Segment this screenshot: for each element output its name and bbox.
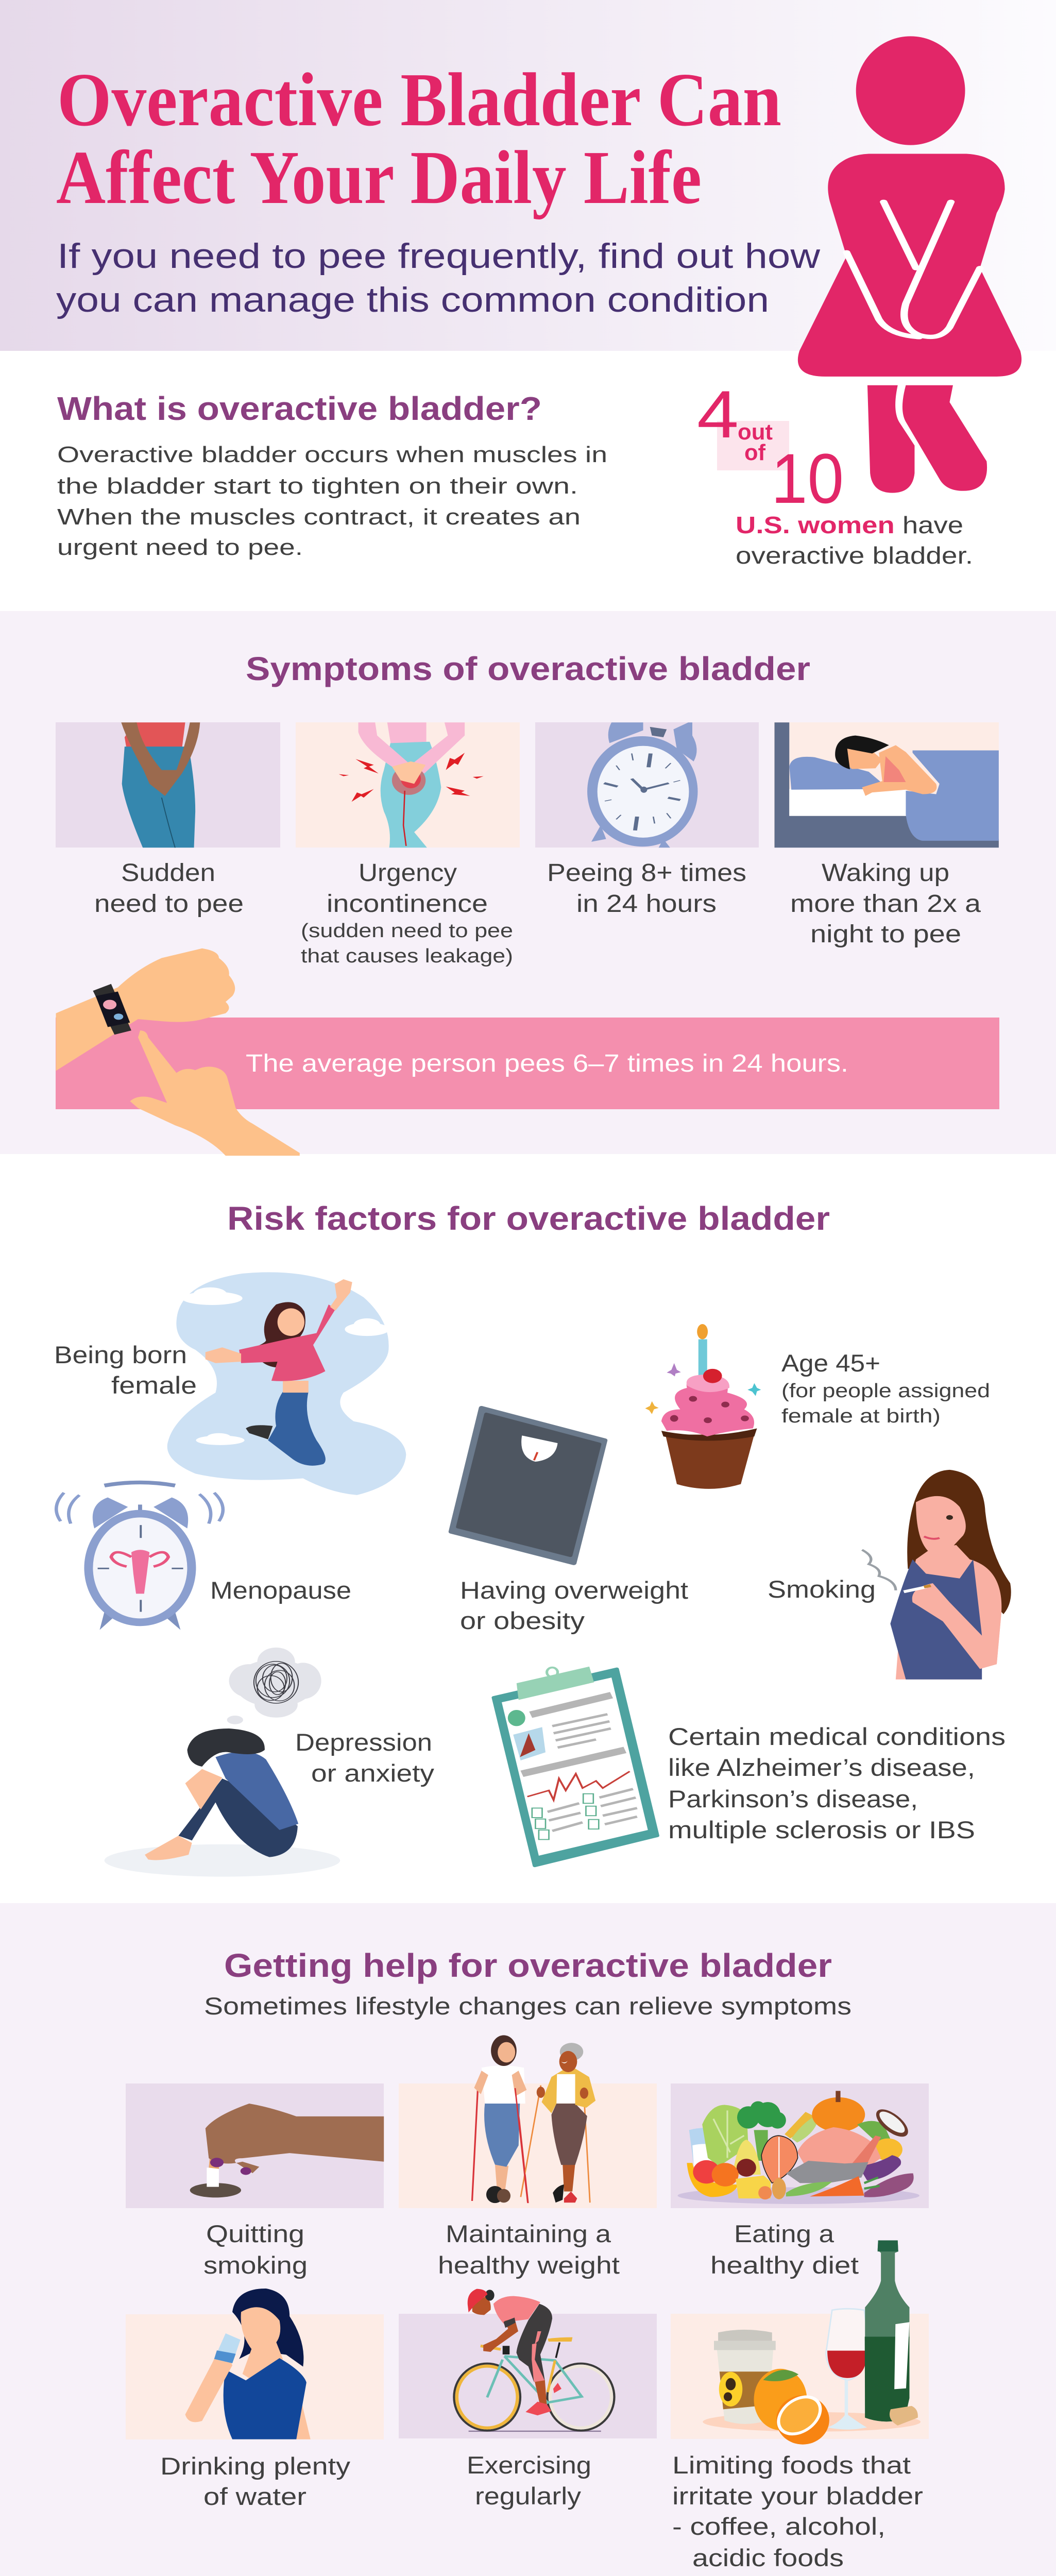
label: maintaining a healthy weight: Maintaining a <box>446 2220 611 2247</box>
label: eating a healthy diet: Eating a <box>734 2220 834 2247</box>
panel: urgency incontinence <box>296 722 520 848</box>
label: sudden need to pee: need to pee <box>94 890 244 918</box>
label: certain medical conditions: like Alzheimer’s disease, <box>668 1754 975 1781</box>
label: urgency incontinence: Urgency <box>359 859 457 887</box>
subtitle <box>56 236 821 319</box>
label: eating a healthy diet <box>710 2220 859 2279</box>
label: certain medical conditions: Parkinson’s disease, <box>668 1785 918 1812</box>
subtitle: you can manage this common condition <box>56 280 769 319</box>
icon: hands with smartwatch <box>56 948 300 1156</box>
text block: definition <box>57 442 607 560</box>
label: being born female <box>54 1341 197 1399</box>
illustration: woman smoking <box>862 1470 1011 1680</box>
label: limiting foods: Limiting foods that <box>672 2451 911 2479</box>
label: limiting foods <box>672 2451 923 2571</box>
label: age 45+: Age 45+ <box>781 1349 880 1377</box>
label: certain medical conditions: multiple sclerosis or IBS <box>668 1816 975 1843</box>
icon: medical clipboard <box>493 1667 657 1866</box>
illustration: being born female woman jumping <box>167 1272 406 1495</box>
panel: header background <box>0 0 1056 351</box>
label: exercising regularly: regularly <box>475 2482 582 2510</box>
panel: drinking plenty of water <box>126 2289 384 2439</box>
panel: eating a healthy diet <box>671 2083 929 2208</box>
label: exercising regularly: Exercising <box>467 2451 591 2479</box>
callout: 4 out of 10 statistic: U.S. women have <box>736 512 963 538</box>
label: urgency incontinence <box>301 859 513 967</box>
panel: limiting irritating foods <box>671 2240 929 2445</box>
panel: peeing 8+ times clock <box>535 722 759 848</box>
panel: getting help background <box>0 1903 1056 2576</box>
subtitle: If you need to pee frequently, find out how <box>57 236 821 276</box>
label: waking up more than 2x: Waking up <box>822 859 949 887</box>
panel: sudden need to pee <box>56 722 280 848</box>
label: being born female: female <box>111 1371 197 1399</box>
panel: maintaining a healthy weight <box>399 2035 657 2208</box>
label: urgency incontinence: incontinence <box>327 890 488 918</box>
label: drinking plenty of water: Drinking plenty <box>160 2452 351 2480</box>
label: quitting smoking <box>203 2220 308 2279</box>
label: sudden need to pee: Sudden <box>121 859 215 887</box>
label: maintaining a healthy weight <box>438 2220 620 2279</box>
label: certain medical conditions: Certain medical conditions <box>668 1723 1006 1750</box>
label: depression or anxiety: Depression <box>295 1728 432 1756</box>
label: drinking plenty of water: of water <box>203 2483 306 2510</box>
label: peeing 8+ times: Peeing 8+ times <box>547 859 746 887</box>
label: having overweight or obesity: or obesity <box>460 1607 585 1634</box>
label: limiting foods: acidic foods <box>692 2544 844 2571</box>
label: limiting foods: - coffee, alcohol, <box>672 2513 885 2540</box>
icon: cupcake <box>645 1324 761 1489</box>
title <box>56 58 781 220</box>
text block: definition: When the muscles contract, it creates an <box>57 504 581 530</box>
label: quitting smoking: Quitting <box>206 2220 304 2247</box>
callout: 4 out of 10 statistic <box>697 377 973 569</box>
subheading: lifestyle changes: Sometimes lifestyle changes can relieve symptoms <box>204 1992 851 2020</box>
label: sudden need to pee <box>94 859 244 918</box>
label: smoking: Smoking <box>768 1575 876 1603</box>
callout bar: average pees <box>56 1018 999 1109</box>
panel: risk factors background <box>0 1154 1056 1903</box>
label: being born female: Being born <box>54 1341 187 1368</box>
label: exercising regularly <box>467 2451 591 2510</box>
label: having overweight or obesity: Having overweight <box>460 1577 688 1604</box>
text block: definition: urgent need to pee. <box>57 535 303 560</box>
label: peeing 8+ times: in 24 hours <box>576 890 717 918</box>
label: waking up more than 2x: more than 2x a <box>790 890 981 918</box>
callout bar: average pees: The average person pees 6–7 times in 24 hours. <box>246 1050 848 1077</box>
label: certain medical conditions <box>668 1723 1006 1843</box>
label: waking up more than 2x: night to pee <box>810 921 961 948</box>
callout: 4 out of 10 statistic: of <box>744 440 765 465</box>
heading: getting help: Getting help for overactive bladder <box>224 1947 832 1984</box>
panel: exercising regularly <box>399 2289 657 2438</box>
label: peeing 8+ times <box>547 859 746 918</box>
panel: quitting smoking <box>126 2083 384 2208</box>
callout: 4 out of 10 statistic: 4 <box>697 377 739 452</box>
title: Affect Your Daily Life <box>56 135 702 220</box>
label: urgency incontinence: (sudden need to pee <box>301 920 513 942</box>
label: urgency incontinence: that causes leakage) <box>301 945 513 967</box>
heading: risk factors: Risk factors for overactive bladder <box>227 1200 830 1237</box>
heading: symptoms: Symptoms of overactive bladder <box>246 650 810 687</box>
label: depression or anxiety <box>295 1728 435 1787</box>
label: drinking plenty of water <box>160 2452 351 2510</box>
panel: what is overactive bladder background <box>0 351 1056 611</box>
illustration: person with depression or anxiety <box>105 1648 340 1877</box>
panel: symptoms background <box>0 611 1056 1154</box>
callout: 4 out of 10 statistic: out <box>738 419 773 445</box>
label: quitting smoking: smoking <box>203 2251 308 2279</box>
icon: pink woman figure <box>798 36 1021 493</box>
heading: what is overactive bladder: What is overactive bladder? <box>57 390 542 427</box>
label: menopause: Menopause <box>210 1577 351 1604</box>
icon: bathroom scale <box>451 1408 605 1563</box>
text block: definition: Overactive bladder occurs when muscles in <box>57 442 607 467</box>
title: Overactive Bladder Can <box>57 58 781 142</box>
label: having overweight or obesity <box>460 1577 688 1634</box>
callout: 4 out of 10 statistic: overactive bladder. <box>736 542 973 569</box>
label: eating a healthy diet: healthy diet <box>710 2251 859 2279</box>
text block: definition: the bladder start to tighten on their own. <box>57 473 578 499</box>
label: maintaining a healthy weight: healthy weight <box>438 2251 620 2279</box>
label: age 45+: female at birth) <box>781 1405 941 1427</box>
label: depression or anxiety: or anxiety <box>311 1759 435 1787</box>
label: age 45+ <box>781 1349 990 1427</box>
icon: alarm clock with uterus <box>56 1482 223 1630</box>
label: limiting foods: irritate your bladder <box>672 2482 923 2510</box>
panel: waking up at night <box>774 722 999 848</box>
label: age 45+: (for people assigned <box>781 1380 990 1402</box>
callout: 4 out of 10 statistic: 10 <box>771 439 844 518</box>
label: waking up more than 2x <box>790 859 981 948</box>
